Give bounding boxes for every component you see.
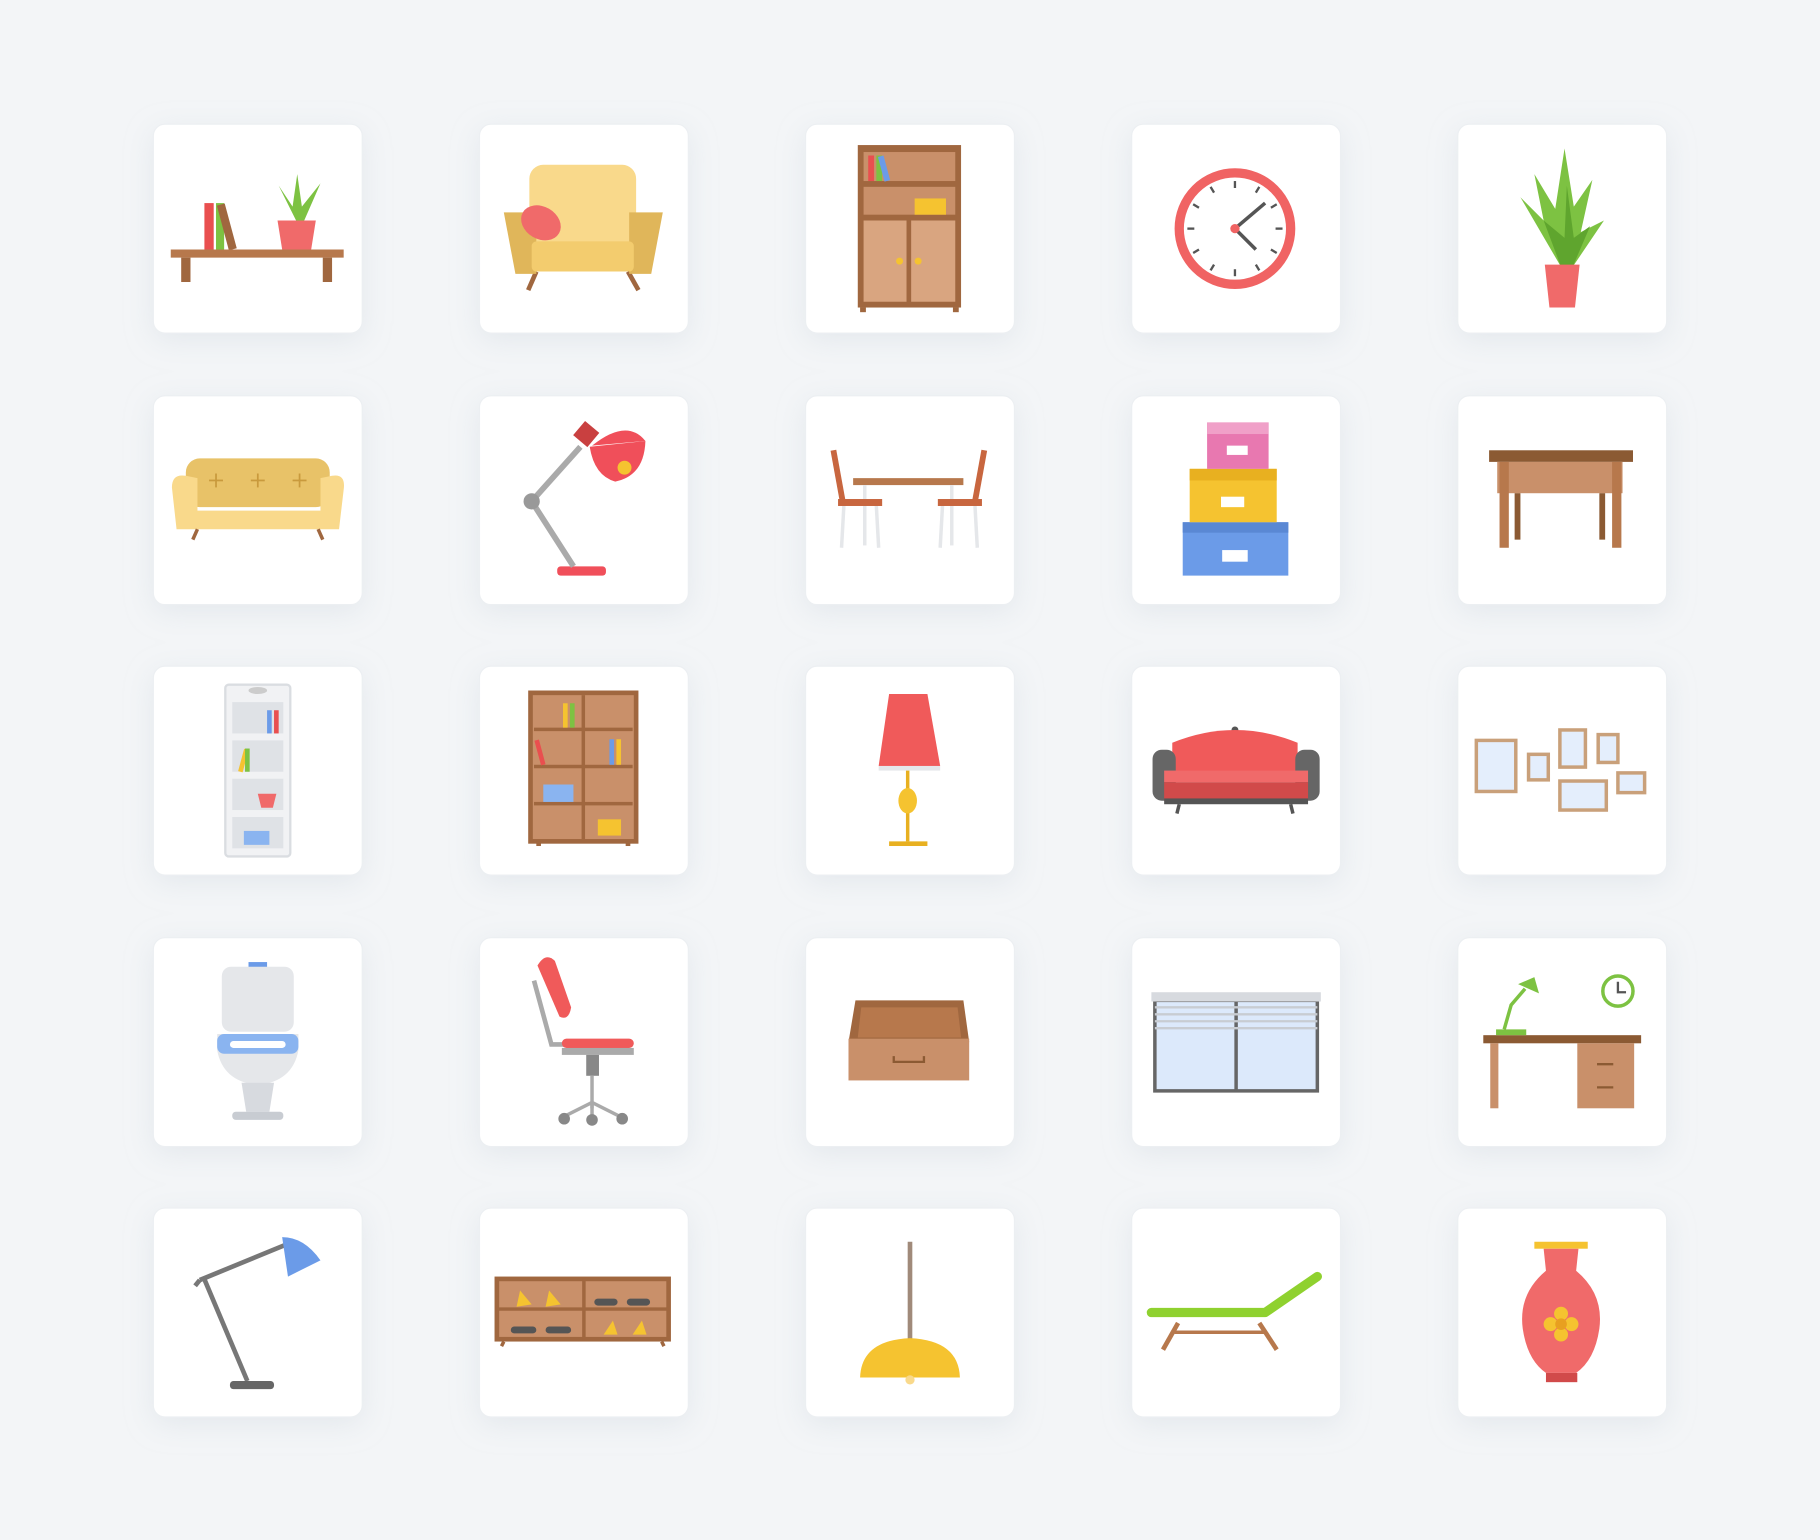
icon: sun lounger bbox=[1151, 1277, 1317, 1350]
icon: armchair bbox=[504, 165, 663, 290]
icon: work desk bbox=[1483, 976, 1641, 1108]
icon: toilet bbox=[217, 962, 298, 1120]
icon: shoe rack bbox=[497, 1279, 669, 1346]
icon: white shelf bbox=[225, 685, 290, 856]
icon: vase bbox=[1522, 1242, 1600, 1382]
icon: office chair bbox=[534, 957, 634, 1126]
icon: clock bbox=[1179, 173, 1291, 284]
icon: table lamp bbox=[879, 694, 940, 846]
icon: picture frames bbox=[1476, 730, 1645, 810]
icon: desk lamp bbox=[524, 421, 645, 576]
icon: cabinet bbox=[858, 145, 961, 312]
icon: window blinds bbox=[1151, 992, 1321, 1091]
icon: potted plant bbox=[1520, 149, 1604, 308]
icon: bookcase bbox=[531, 693, 636, 846]
icon: dining set bbox=[833, 450, 984, 548]
icon: wall shelf bbox=[171, 174, 344, 282]
icon: table bbox=[1489, 450, 1633, 548]
icon: drawer bbox=[848, 1000, 969, 1080]
icon: stacked boxes bbox=[1183, 422, 1288, 576]
icon: floor lamp bbox=[195, 1237, 320, 1389]
icon: sofa bbox=[172, 458, 344, 540]
icon: pendant lamp bbox=[860, 1242, 960, 1384]
icon: red sofa bbox=[1153, 726, 1320, 814]
cards grid bbox=[153, 124, 1667, 1417]
